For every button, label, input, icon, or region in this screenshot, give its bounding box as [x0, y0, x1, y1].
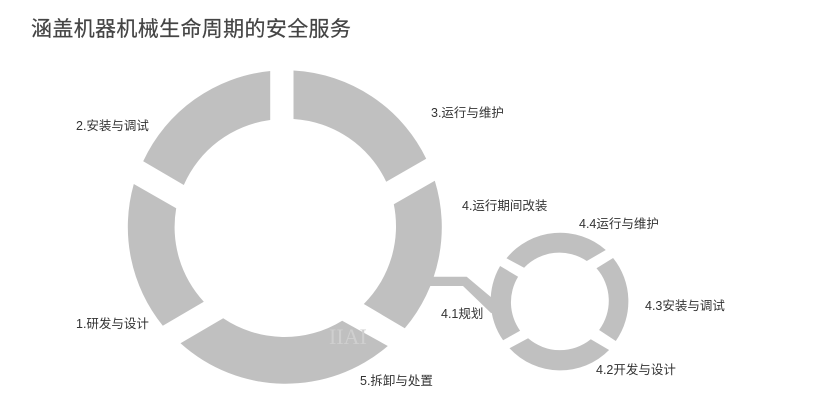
segment: 2 installation and commissioning — [143, 71, 270, 185]
segment: 4.4 operation and maintenance — [506, 233, 606, 268]
segment: 5 dismantling and disposal — [180, 318, 388, 384]
label: 3: 3.运行与维护 — [431, 106, 504, 120]
segment: 4.3 installation and commissioning — [596, 258, 628, 341]
label: 4.1: 4.1规划 — [441, 306, 483, 321]
segment: 4 modification during operation — [364, 181, 442, 328]
chart: main lifecycle ring — [128, 70, 442, 384]
title: 涵盖机器机械生命周期的安全服务 — [31, 18, 351, 41]
label: 1: 1.研发与设计 — [76, 316, 149, 331]
label: 2: 2.安装与调试 — [76, 118, 149, 133]
segment: 1 research and design — [128, 184, 204, 326]
label: 4: 4.运行期间改装 — [462, 199, 547, 213]
segment: 3 operation and maintenance — [294, 70, 426, 182]
label: 4.3: 4.3安装与调试 — [645, 298, 725, 313]
connector between main ring and sub ring — [428, 277, 496, 313]
label: 4.2: 4.2开发与设计 — [596, 362, 676, 377]
watermark: IIAI — [329, 324, 367, 349]
segment: 4.1 planning — [491, 266, 520, 340]
label: 5: 5.拆卸与处置 — [360, 373, 433, 388]
segment: 4.2 development and design — [510, 338, 609, 370]
label: 4.4: 4.4运行与维护 — [579, 217, 659, 231]
chart: sub ring for modification — [491, 233, 628, 370]
